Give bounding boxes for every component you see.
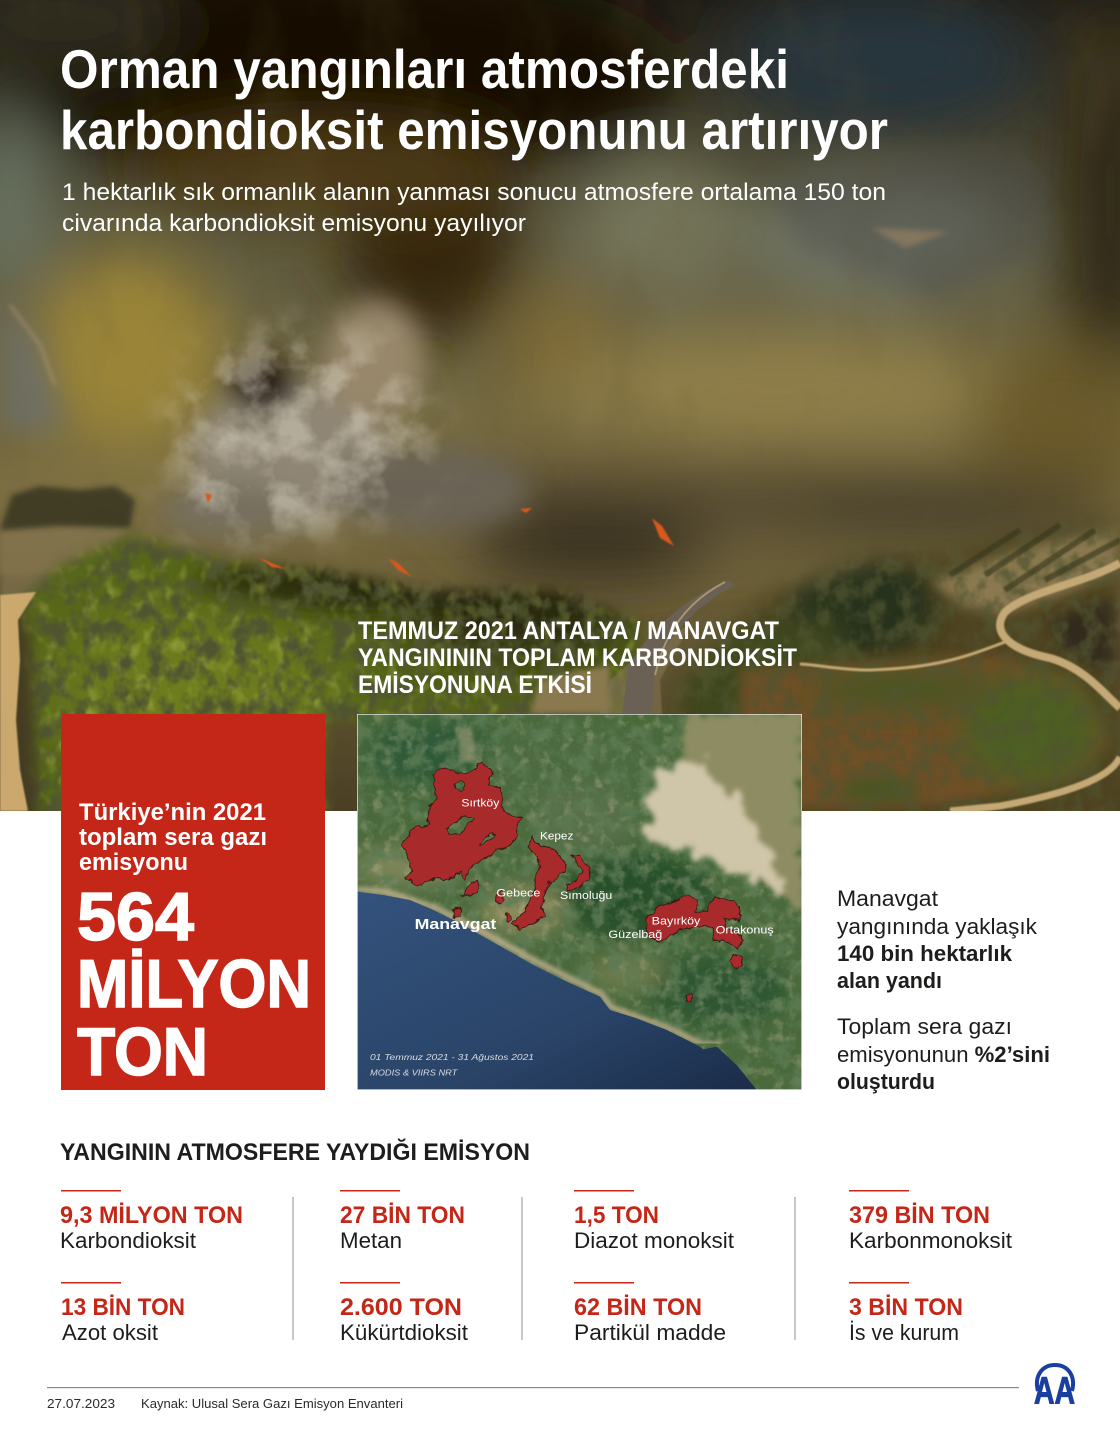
place labels: Güzelbağ: [608, 929, 662, 941]
item: methane: 27 BİN TON: [340, 1202, 465, 1229]
place labels: Ortakonuş: [716, 924, 774, 936]
side note: [837, 886, 1050, 1094]
item: nitrogen oxide: [61, 1282, 185, 1345]
item: nitrous oxide: [574, 1190, 734, 1253]
map heading: [358, 617, 797, 699]
forest right and hillside: [671, 518, 1120, 811]
background photo: forest fire and smoke: [0, 0, 1120, 830]
map caption: [370, 1052, 534, 1077]
panel caption: Türkiye’nin 2021: [79, 799, 266, 826]
item: methane: [340, 1190, 465, 1253]
item: carbon monoxide: Karbonmonoksit: [849, 1228, 1012, 1253]
item: carbon monoxide: [849, 1190, 1012, 1253]
item: nitrogen oxide: 13 BİN TON: [61, 1294, 185, 1321]
icon: AA logo: [1034, 1365, 1075, 1412]
side note: emisyonunun %2’sini: [837, 1042, 1050, 1067]
place labels: Kepez: [540, 831, 573, 843]
big number: 564: [77, 879, 194, 955]
subtitle: civarında karbondioksit emisyonu yayılıyor: [62, 210, 526, 237]
right winding road: [800, 563, 1120, 811]
title: Orman yangınları atmosferdeki: [60, 38, 789, 100]
item: carbon dioxide: Karbondioksit: [60, 1228, 196, 1253]
satellite map: [357, 714, 802, 1090]
emissions table: [60, 1190, 1012, 1345]
icon: AA logo: AA: [1034, 1370, 1075, 1412]
side note: Manavgat: [837, 886, 938, 911]
smoke plume: [150, 300, 530, 540]
item: nitrous oxide: Diazot monoksit: [574, 1228, 734, 1253]
rocky uplands: [457, 714, 802, 910]
subtitle: 1 hektarlık sık ormanlık alanın yanması sonucu atmosfere ortalama 150 ton: [62, 179, 886, 206]
map caption: MODIS & VIIRS NRT: [370, 1067, 458, 1077]
left dirt road: [0, 592, 36, 811]
emissions heading: YANGININ ATMOSFERE YAYDIĞI EMİSYON: [60, 1138, 530, 1166]
panel caption: [79, 799, 267, 876]
place labels: [415, 798, 774, 941]
tree line behind: [0, 486, 135, 530]
item: soot: 3 BİN TON: [849, 1294, 963, 1321]
centre highway: [600, 580, 735, 714]
place labels: Bayırköy: [652, 915, 701, 927]
map caption: 01 Temmuz 2021 - 31 Ağustos 2021: [370, 1052, 534, 1062]
map heading: EMİSYONUNA ETKİSİ: [358, 671, 592, 699]
item: carbon dioxide: [60, 1190, 243, 1253]
place labels: Manavgat: [415, 917, 496, 933]
item: sulfur dioxide: [340, 1282, 468, 1345]
item: carbon monoxide: 379 BİN TON: [849, 1202, 990, 1229]
footer: [47, 1387, 1019, 1411]
place labels: Sırtköy: [461, 798, 500, 810]
side note: yangınında yaklaşık: [837, 914, 1038, 939]
item: sulfur dioxide: Kükürtdioksit: [340, 1320, 468, 1345]
panel: total greenhouse emission: [61, 714, 325, 1090]
distant mountain: [782, 173, 1027, 296]
date: 27.07.2023: [47, 1397, 115, 1411]
item: sulfur dioxide: 2.600 TON: [340, 1294, 462, 1321]
forest left: [20, 532, 644, 811]
side note: 140 bin hektarlık: [837, 941, 1013, 966]
title: [60, 38, 888, 161]
smoke texture: [256, 0, 1106, 410]
item: particulate matter: 62 BİN TON: [574, 1294, 702, 1321]
big number: TON: [77, 1014, 208, 1090]
item: nitrous oxide: 1,5 TON: [574, 1202, 659, 1229]
item: soot: İs ve kurum: [849, 1320, 959, 1345]
map heading: TEMMUZ 2021 ANTALYA / MANAVGAT: [358, 617, 779, 645]
panel caption: emisyonu: [79, 849, 188, 876]
title: karbondioksit emisyonunu artırıyor: [60, 99, 888, 161]
source: Kaynak: Ulusal Sera Gazı Emisyon Envanteri: [141, 1397, 403, 1411]
item: particulate matter: [574, 1282, 726, 1345]
side note: alan yandı: [837, 968, 942, 993]
subtitle: [62, 179, 886, 237]
big number: MİLYON: [77, 946, 311, 1022]
burned areas: [402, 763, 744, 1002]
item: methane: Metan: [340, 1228, 402, 1253]
coastal plain: [357, 887, 763, 1090]
ground by the roadside: [0, 576, 36, 792]
place labels: Sımoluğu: [560, 890, 612, 902]
item: soot: [849, 1282, 963, 1345]
item: nitrogen oxide: Azot oksit: [62, 1320, 158, 1345]
place labels: Gebece: [496, 887, 540, 899]
sea: [357, 892, 757, 1090]
item: particulate matter: Partikül madde: [574, 1320, 726, 1345]
side note: Toplam sera gazı: [837, 1014, 1012, 1039]
orchard rows: [950, 525, 1120, 590]
fire spots: [205, 493, 674, 577]
panel caption: toplam sera gazı: [79, 824, 267, 851]
big number: [77, 879, 311, 1090]
side note: oluşturdu: [837, 1069, 935, 1094]
item: carbon dioxide: 9,3 MİLYON TON: [60, 1202, 243, 1229]
map heading: YANGINININ TOPLAM KARBONDİOKSİT: [358, 644, 797, 672]
